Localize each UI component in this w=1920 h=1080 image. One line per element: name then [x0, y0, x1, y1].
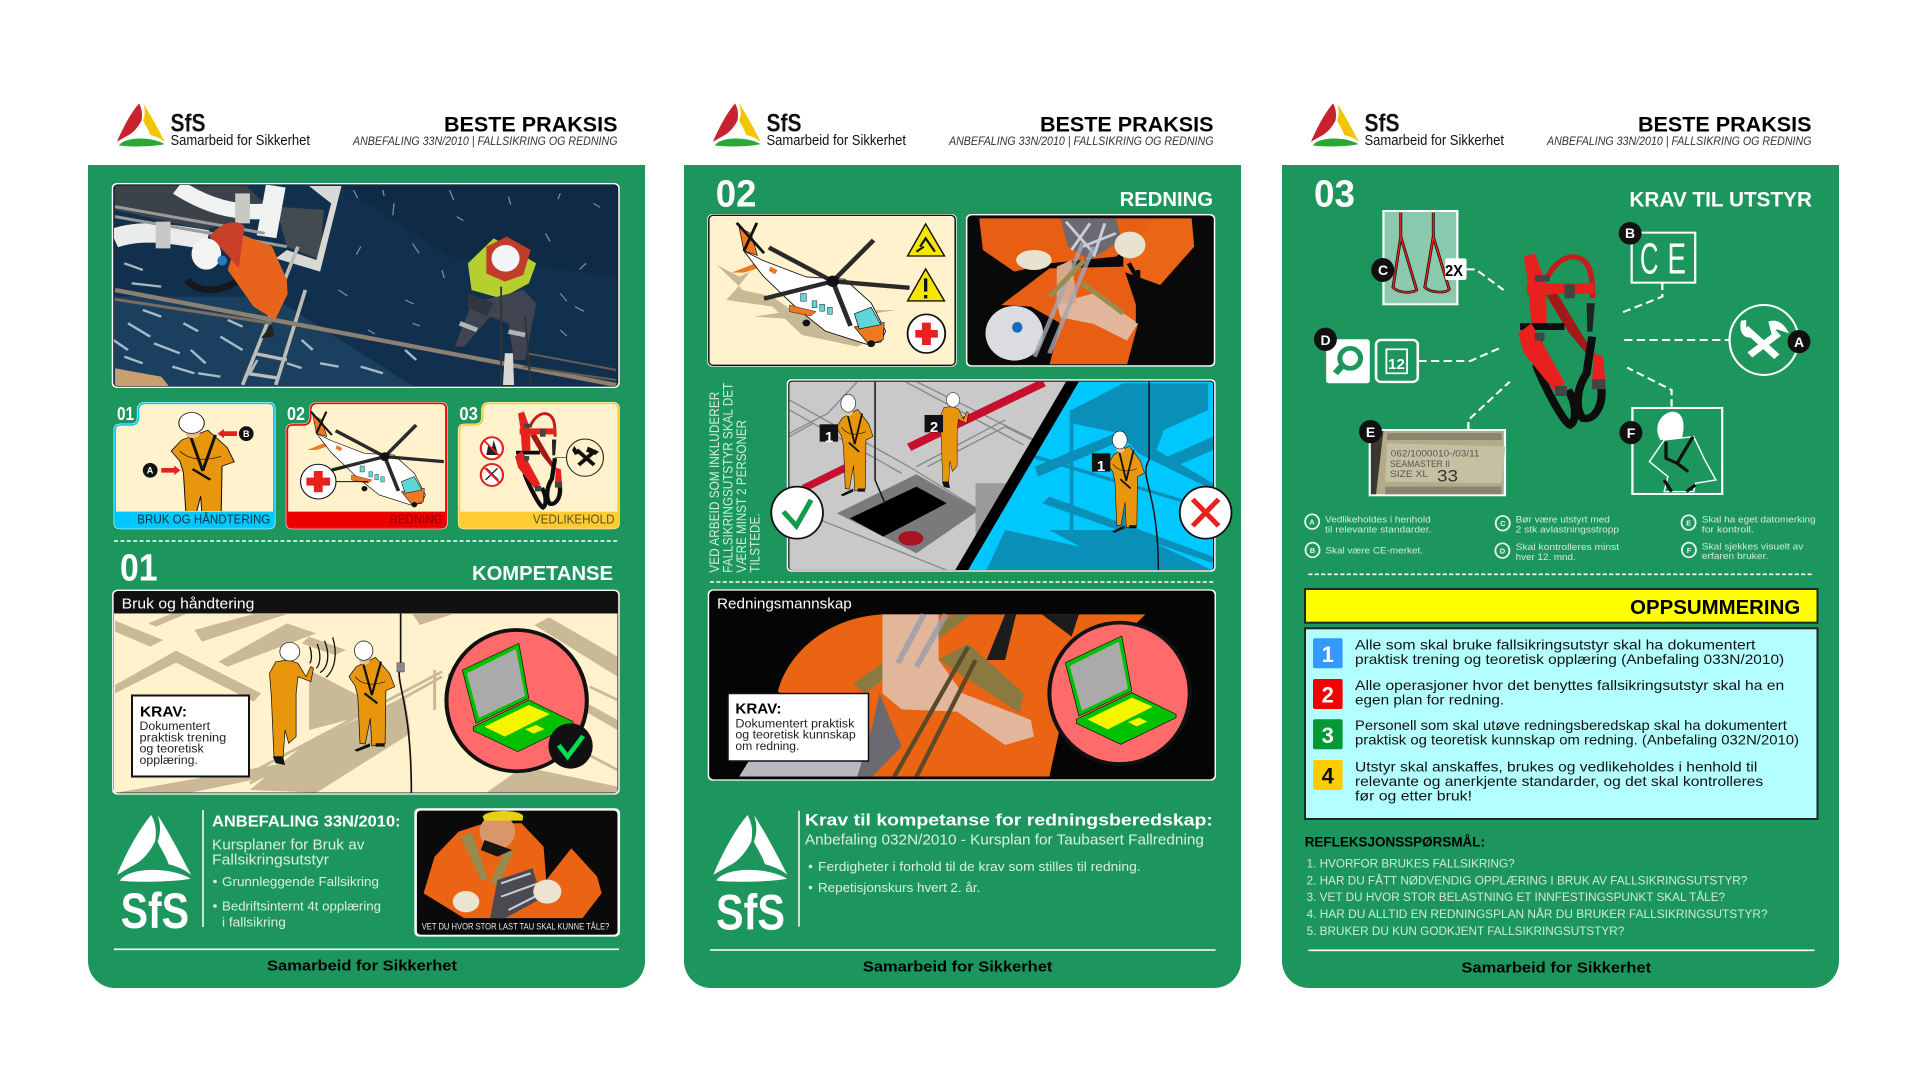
- item B: CE box: [1619, 222, 1695, 283]
- header subtitle: ANBEFALING 33N/2010 | FALLSIKRING OG REDNING: [1546, 136, 1812, 148]
- legend: equipment requirements: Skal sjekkes visuelt av: [1702, 541, 1804, 552]
- photo: rope access workers above the sea: [112, 183, 620, 388]
- recommendation text block: Bedriftsinternt 4t opplæring: [222, 900, 381, 914]
- panel: 1 background: [88, 165, 645, 988]
- card 01 B letter: B: [243, 429, 250, 439]
- text: two persons rule: VED ARBEID SOM INKLUDERER: [707, 391, 722, 573]
- legend: equipment requirements: B: [1310, 546, 1316, 555]
- panel: redningsmannskap: [708, 589, 1216, 781]
- icon: white SfS logo panel 2: [713, 815, 787, 882]
- point 2: [1313, 677, 1784, 709]
- marker letters: C: [1378, 262, 1388, 278]
- red cross sign: [301, 464, 368, 499]
- card 01 label: BRUK OG HÅNDTERING: [137, 511, 270, 526]
- recommendation text block: ANBEFALING 33N/2010:: [212, 814, 401, 831]
- header title: BESTE PRAKSIS: [1040, 114, 1214, 137]
- point 4: relevante og anerkjente standarder, og det skal kontrolleres: [1355, 773, 1763, 789]
- competence requirements text block: Ferdigheter i forhold til de krav som stilles til redning.: [818, 860, 1141, 874]
- legend: equipment requirements: F: [1687, 546, 1692, 555]
- label photo text: [1390, 449, 1480, 486]
- section number 01: 01: [120, 548, 158, 590]
- badge: correct: [771, 487, 823, 539]
- point 3: 3: [1322, 723, 1334, 748]
- recommendation text block: i fallsikring: [222, 916, 286, 930]
- heading: krav til utstyr: KRAV TIL UTSTYR: [1629, 189, 1812, 212]
- legend: equipment requirements: A: [1309, 518, 1315, 526]
- reflection question list: 3. VET DU HVOR STOR BELASTNING ET INNFESTINGSPUNKT SKAL TÅLE?: [1307, 891, 1725, 904]
- warning: fall hazard: [908, 224, 944, 256]
- point 4: [1313, 758, 1763, 804]
- card 01 A letter: A: [147, 466, 154, 476]
- callout: krav: KRAV:: [140, 704, 187, 721]
- label photo text: SIZE XL: [1390, 469, 1428, 480]
- legend: equipment requirements: E: [1686, 518, 1691, 528]
- worker 2 standby: [940, 393, 968, 488]
- heading: redning: REDNING: [1120, 189, 1213, 211]
- photo: rescue over arm: [966, 214, 1215, 367]
- icon: white SfS logo panel 1: [117, 815, 191, 882]
- legend: equipment requirements: til relevante standarder.: [1325, 525, 1431, 536]
- icon: SfS logo: [1311, 103, 1359, 146]
- equipment diagram: [1314, 211, 1810, 495]
- item D: inspection icons: [1314, 328, 1418, 383]
- card 01 number: 01: [117, 404, 134, 424]
- callout: krav: [728, 694, 868, 761]
- photo caption: VET DU HVOR STOR LAST TAU SKAL KUNNE TÅLE?: [422, 921, 609, 931]
- legend: equipment requirements: Vedlikeholdes i henhold: [1325, 515, 1431, 526]
- header title: BESTE PRAKSIS: [444, 114, 618, 137]
- card: 01 bruk og håndtering: [115, 403, 274, 532]
- card 03 label: VEDLIKEHOLD: [533, 512, 614, 526]
- red cross sign: [908, 314, 945, 353]
- marker letters: D: [1320, 332, 1331, 348]
- heading: kompetanse: KOMPETANSE: [472, 563, 613, 585]
- item C: relief straps: [1371, 211, 1467, 304]
- legend: equipment requirements: for kontroll.: [1702, 525, 1754, 536]
- CE mark: C: C: [1640, 234, 1658, 283]
- heading: reflection questions: REFLEKSJONSSPØRSMÅL:: [1305, 835, 1485, 850]
- callout: krav: opplæring.: [140, 755, 198, 767]
- legend: equipment requirements: 2 stk avlastningsstropp: [1516, 525, 1619, 536]
- helicopter: [732, 223, 910, 347]
- icon: SfS logo: [713, 103, 761, 146]
- panel: 3 background: [1282, 165, 1839, 988]
- recommendation text block: Kursplaner for Bruk av: [212, 837, 365, 853]
- marker 2: 2: [930, 419, 938, 436]
- dashed connectors: [1419, 269, 1729, 429]
- competence requirements text block: [805, 811, 1213, 895]
- harness: [515, 412, 562, 508]
- helicopter: [307, 412, 444, 507]
- point 1: Alle som skal bruke fallsikringsutstyr skal ha dokumentert: [1355, 636, 1756, 652]
- marker 1 right: 1: [1097, 458, 1105, 475]
- competence requirements text block: Anbefaling 032N/2010 - Kursplan for Taubasert Fallredning: [805, 832, 1204, 848]
- panel: bruk og håndtering illustration: [112, 590, 620, 795]
- legend: equipment requirements: [1305, 514, 1816, 563]
- reflection question list: 4. HAR DU ALLTID EN REDNINGSPLAN NÅR DU BRUKER FALLSIKRINGSUTSTYR?: [1307, 908, 1768, 921]
- white SfS wordmark panel 1: SfS: [121, 883, 189, 939]
- callout: krav: KRAV:: [735, 700, 781, 717]
- radio waves: [310, 637, 335, 677]
- legend: equipment requirements: Skal ha eget datomerking: [1702, 515, 1816, 526]
- text: two persons rule: VÆRE MINST 2 PERSONER: [734, 420, 749, 573]
- recommendation text block: Fallsikringsutstyr: [212, 852, 329, 868]
- point 4: Utstyr skal anskaffes, brukes og vedlikeholdes i henhold til: [1355, 758, 1757, 774]
- header subtitle: ANBEFALING 33N/2010 | FALLSIKRING OG REDNING: [352, 136, 618, 148]
- point 2: egen plan for redning.: [1355, 692, 1504, 708]
- legend: equipment requirements: Skal kontrolleres minst: [1516, 542, 1619, 553]
- banner: oppsummering: [1305, 589, 1818, 623]
- callout: krav: og teoretisk kunnskap: [735, 730, 856, 742]
- header: panel 2: [713, 103, 1214, 149]
- point 3: Personell som skal utøve redningsberedskap skal ha dokumentert: [1355, 717, 1787, 733]
- legend: equipment requirements: D: [1500, 546, 1506, 556]
- panel: summary points: [1305, 628, 1818, 819]
- legend: equipment requirements: Skal være CE-merket.: [1325, 545, 1423, 556]
- point 2: Alle operasjoner hvor det benyttes fallsikringsutstyr skal ha en: [1355, 677, 1784, 693]
- reflection question list: 5. BRUKER DU KUN GODKJENT FALLSIKRINGSUTSTYR?: [1307, 926, 1624, 938]
- point 4: før og etter bruk!: [1355, 788, 1472, 804]
- legend: equipment requirements: erfaren bruker.: [1702, 551, 1768, 562]
- 2X tag: 2X: [1445, 263, 1463, 280]
- badge: wrong: [1180, 487, 1232, 539]
- point 3: praktisk og teoretisk kunnskap om redning. (Anbefaling 032N/2010): [1355, 732, 1799, 748]
- panel: two person scene: [771, 379, 1232, 572]
- reflection question list: 1. HVORFOR BRUKES FALLSIKRING?: [1307, 858, 1515, 870]
- item A: tools circle: [1730, 305, 1810, 375]
- legend: equipment requirements: hver 12. mnd.: [1516, 552, 1576, 563]
- worker checking harness: [170, 412, 235, 511]
- text: two persons rule: TILSTEDE.: [747, 513, 762, 573]
- marker letters: F: [1627, 425, 1636, 441]
- callout: krav: om redning.: [735, 741, 799, 753]
- card: 03 vedlikehold: [459, 403, 618, 528]
- worker 1 with harness: [836, 394, 873, 496]
- marker 1 left: 1: [825, 429, 833, 446]
- competence requirements text block: Repetisjonskurs hvert 2. år.: [818, 881, 980, 895]
- legend: equipment requirements: Bør være utstyrt med: [1516, 515, 1610, 526]
- callout: krav: Dokumentert: [140, 721, 211, 733]
- header: panel 1: [117, 103, 618, 149]
- calendar number 12: 12: [1388, 356, 1405, 373]
- card: 02 redning: [287, 403, 446, 528]
- label photo text: 33: [1437, 467, 1458, 486]
- section number 02: 02: [716, 174, 756, 216]
- worker with radio: [270, 642, 313, 765]
- callout: krav: praktisk trening: [140, 732, 226, 744]
- logo wordmark: SfS: [766, 110, 802, 138]
- no scissors icon: [481, 464, 503, 486]
- callout: krav: [132, 696, 249, 776]
- card 03 number: 03: [459, 404, 478, 424]
- header subtitle: ANBEFALING 33N/2010 | FALLSIKRING OG REDNING: [948, 136, 1214, 148]
- logo tagline: Samarbeid for Sikkerhet: [766, 133, 906, 149]
- panel: 2 background: [684, 165, 1241, 988]
- worker alone: [1108, 431, 1145, 533]
- callout: krav: og teoretisk: [140, 744, 204, 756]
- legend: equipment requirements: C: [1500, 519, 1506, 528]
- logo tagline: Samarbeid for Sikkerhet: [1364, 133, 1504, 149]
- logo tagline: Samarbeid for Sikkerhet: [170, 133, 310, 149]
- banner: oppsummering: OPPSUMMERING: [1630, 597, 1800, 619]
- marker letters: B: [1625, 225, 1635, 241]
- header: panel 3: [1311, 103, 1812, 149]
- icon: SfS logo: [117, 103, 165, 146]
- label photo text: 062/1000010-/03/11: [1391, 449, 1480, 460]
- marker letters: [1320, 225, 1804, 441]
- title bar text: Redningsmannskap: [717, 596, 852, 612]
- reflection question list: 2. HAR DU FÅTT NØDVENDIG OPPLÆRING I BRUK AV FALLSIKRINGSUTSTYR?: [1307, 874, 1747, 887]
- worker in harness: [349, 641, 395, 752]
- photo: rescue worker smiling: [414, 808, 620, 937]
- panel: helicopter illustration: [707, 214, 957, 367]
- header title: BESTE PRAKSIS: [1638, 114, 1812, 137]
- harness: [1518, 253, 1605, 425]
- marker letters: A: [1794, 334, 1804, 350]
- point 1: 1: [1322, 642, 1334, 667]
- text: two persons rule: [707, 383, 762, 573]
- laptop e-learning icon: [446, 630, 587, 771]
- warning: general: [908, 269, 944, 301]
- point 1: praktisk trening og teoretisk opplæring (Anbefaling 033N/2010): [1355, 651, 1784, 667]
- no fire icon: [481, 437, 503, 459]
- competence requirements text block: Krav til kompetanse for redningsberedskap:: [805, 811, 1213, 830]
- text: two persons rule: FALLSIKRINGSUTSTYR SKAL DET: [720, 383, 736, 573]
- label photo text: SEAMASTER II: [1390, 459, 1450, 470]
- footer panel 3: Samarbeid for Sikkerhet: [1461, 959, 1651, 976]
- item F: visual check figure: [1619, 408, 1722, 494]
- footer panel 2: Samarbeid for Sikkerhet: [863, 959, 1052, 976]
- tools circle: [555, 439, 603, 476]
- point 2: 2: [1322, 682, 1334, 708]
- point 4: 4: [1322, 764, 1335, 788]
- CE mark: E: E: [1668, 234, 1686, 283]
- white SfS wordmark panel 2: SfS: [716, 884, 785, 940]
- footer panel 1: Samarbeid for Sikkerhet: [267, 958, 457, 975]
- logo wordmark: SfS: [170, 110, 206, 138]
- title bar text: Bruk og håndtering: [122, 596, 254, 612]
- laptop e-learning icon: [1049, 623, 1190, 764]
- callout: krav: Dokumentert praktisk: [735, 718, 855, 730]
- item E: label photo: [1359, 420, 1505, 495]
- point 3: [1313, 717, 1799, 749]
- card 02 label: REDNING: [390, 512, 443, 526]
- point 1: [1313, 636, 1784, 668]
- section number 03: 03: [1314, 174, 1355, 216]
- recommendation text block: [212, 814, 401, 930]
- card 02 number: 02: [287, 404, 305, 424]
- reflection question list: [1307, 858, 1768, 938]
- logo wordmark: SfS: [1364, 110, 1400, 138]
- recommendation text block: Grunnleggende Fallsikring: [222, 875, 379, 889]
- check mark badge: [548, 723, 593, 769]
- marker letters: E: [1366, 424, 1375, 440]
- marker A with arrow: [143, 463, 180, 478]
- marker B with arrow: [217, 426, 254, 441]
